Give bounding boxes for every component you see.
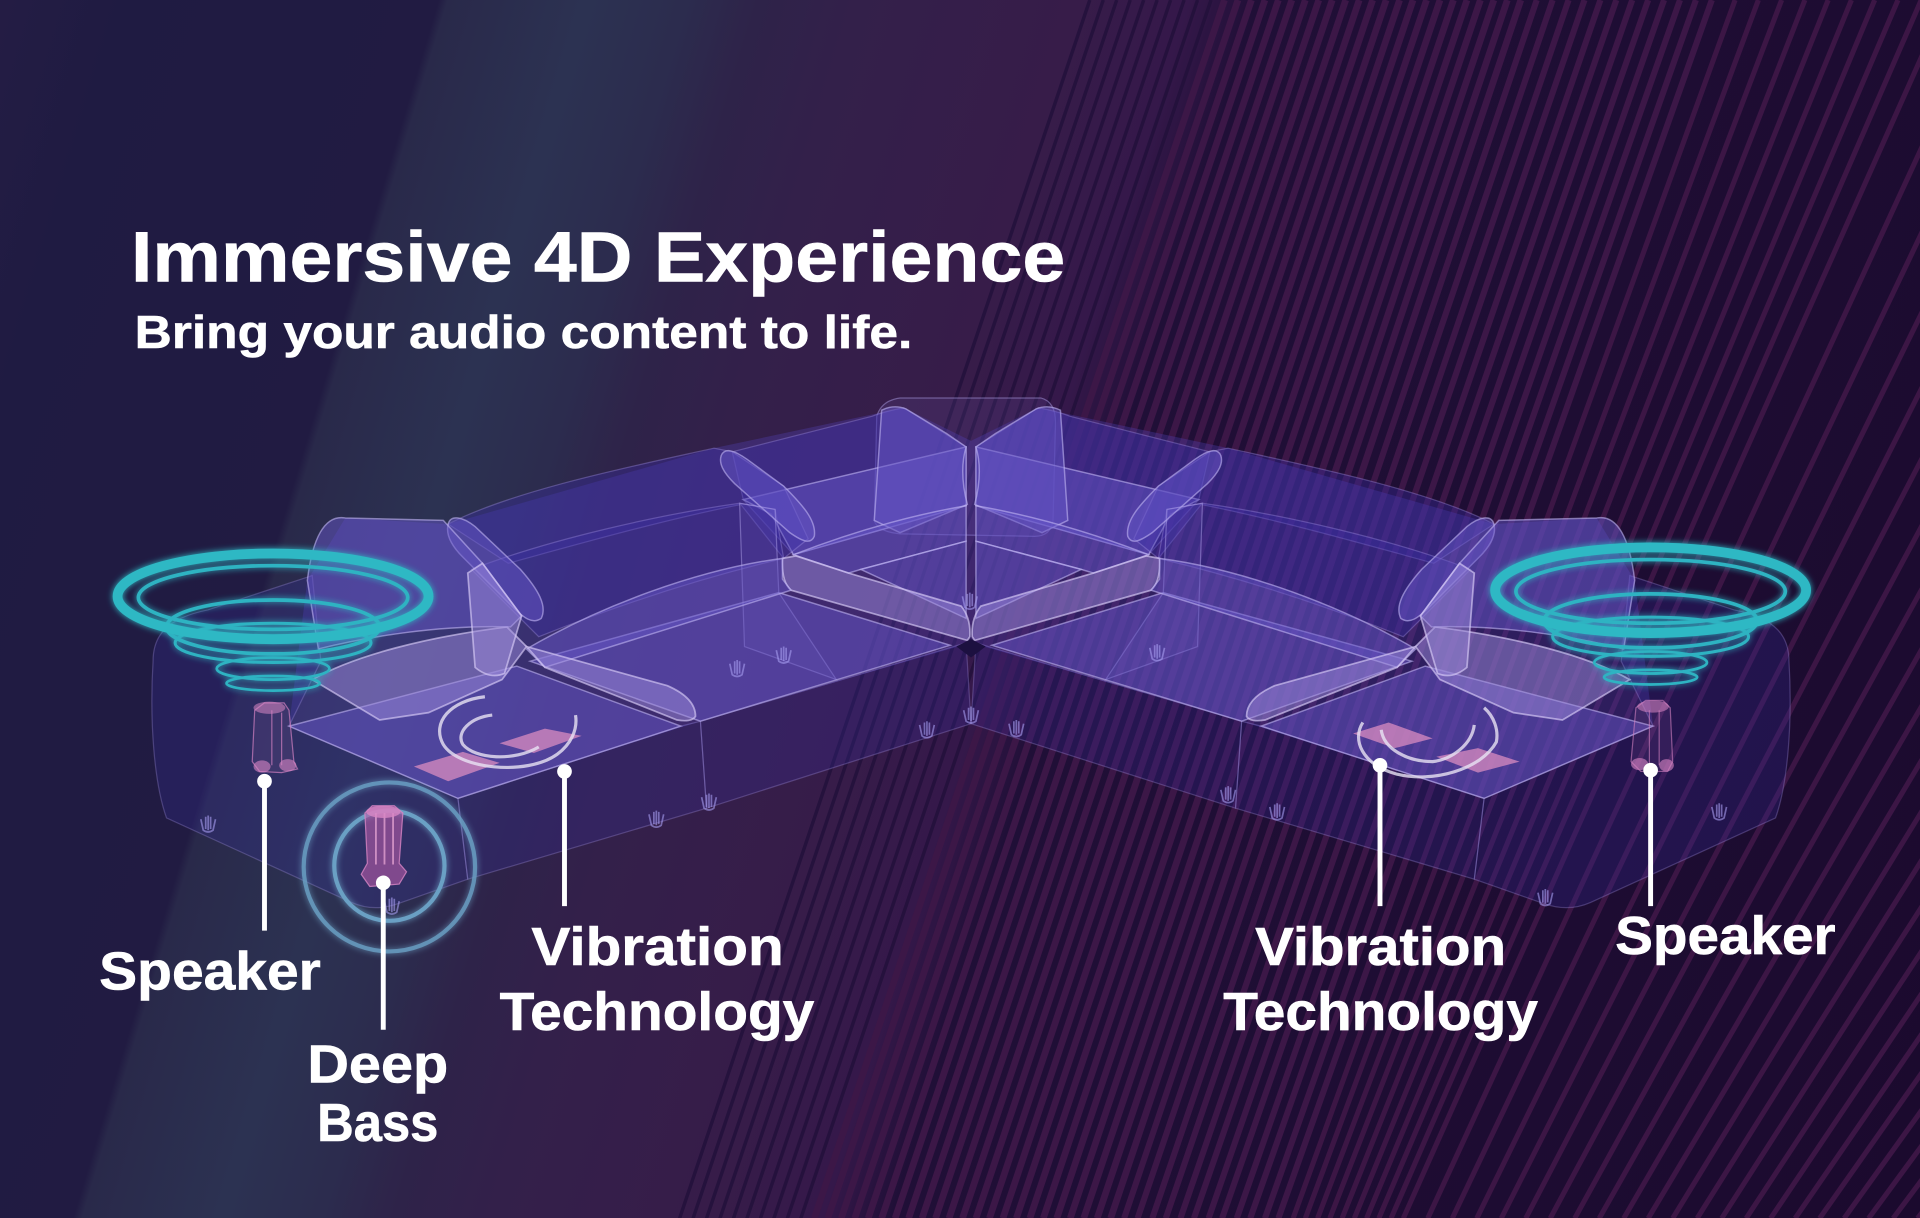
label: deep bass <box>307 1034 448 1153</box>
icon: right vibration ripples <box>1359 708 1497 777</box>
leader: deep bass <box>376 876 391 1030</box>
icon: right speaker unit <box>1631 700 1674 771</box>
label: right vibration technology <box>1223 917 1538 1042</box>
sofa right half <box>971 407 1790 908</box>
icon: deep bass ripple rings <box>304 782 475 951</box>
icon: left speaker unit <box>252 702 298 773</box>
sofa feet <box>201 593 1727 914</box>
label: deep bass: Bass <box>317 1093 438 1153</box>
title: Immersive 4D Experience <box>131 219 1065 298</box>
label: right vibration technology: Vibration <box>1255 917 1506 977</box>
leader: left vibration <box>557 764 572 906</box>
label: left vibration technology <box>500 917 814 1042</box>
label: left speaker: Speaker <box>99 941 321 1001</box>
icon: left speaker cone <box>118 553 429 691</box>
icon: deep bass speaker unit <box>361 806 407 887</box>
label: deep bass: Deep <box>307 1034 448 1094</box>
sofa left half <box>152 407 971 908</box>
back corner cushion <box>874 398 1056 536</box>
icon: right vibration plates <box>1353 722 1520 773</box>
leader: right speaker <box>1643 763 1658 906</box>
icon: left vibration plates <box>414 729 582 781</box>
sofa <box>152 398 1790 914</box>
icon: right speaker cone <box>1495 547 1806 684</box>
label: left vibration technology: Technology <box>500 982 814 1042</box>
sofa centre joint <box>956 639 986 658</box>
leader: left speaker <box>257 774 272 931</box>
subtitle: Bring your audio content to life. <box>135 306 912 358</box>
label: right speaker: Speaker <box>1615 906 1836 966</box>
label: left vibration technology: Vibration <box>531 917 784 977</box>
icon: left vibration ripples <box>440 697 576 767</box>
leader: right vibration <box>1373 758 1387 906</box>
label: right vibration technology: Technology <box>1223 982 1538 1042</box>
